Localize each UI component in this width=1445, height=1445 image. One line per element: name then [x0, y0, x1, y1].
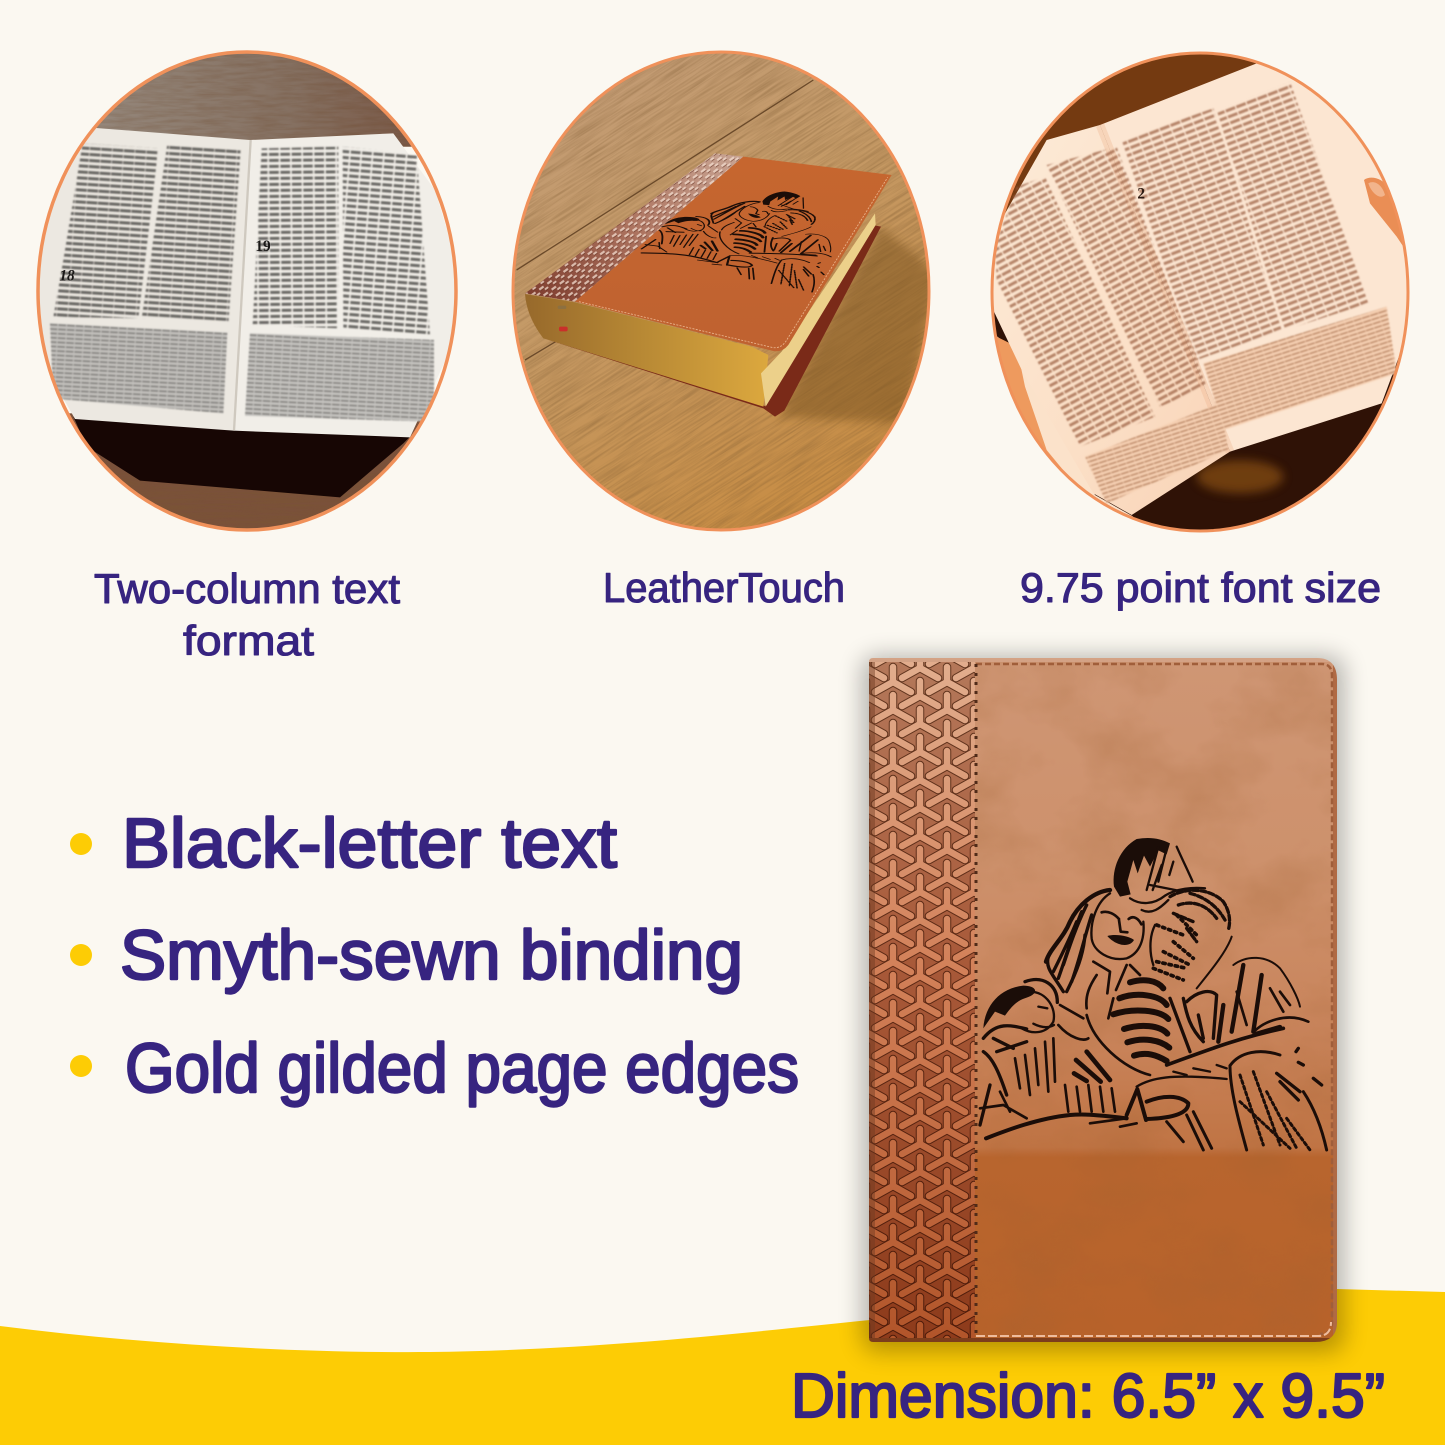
woven spine band: [869, 658, 975, 1342]
open bible pages: [990, 125, 1230, 515]
feature list: [70, 804, 799, 1107]
engraved family portrait: [980, 838, 1327, 1150]
spine band: [525, 153, 743, 302]
bullet: smyth-sewn: Smyth-sewn binding: [120, 916, 743, 994]
small engraving: [640, 192, 832, 292]
panel: font size photo: [980, 40, 1420, 540]
caption: two-column text: Two-column text: [94, 565, 400, 612]
page edges: [525, 294, 768, 407]
chapter number: 2: [1137, 185, 1145, 202]
lower table: [69, 413, 420, 528]
panel: leathertouch book photo: [512, 50, 930, 532]
front cover: [575, 157, 892, 351]
dimension label: Dimension: 6.5” x 9.5”: [791, 1362, 1385, 1431]
leather front: [975, 662, 1333, 1338]
panel: two-column text photo: [30, 40, 470, 540]
open bible pages: [30, 127, 250, 431]
left hand and page stack: [997, 336, 1133, 516]
left study notes: [1085, 403, 1228, 503]
right study notes: [1203, 307, 1397, 430]
right page text: [253, 147, 338, 328]
study notes right: [245, 333, 434, 422]
yellow wave band: [0, 1289, 1445, 1445]
red marker: [559, 327, 568, 331]
chapter numbers: 18: [59, 268, 75, 285]
left page text: [995, 177, 1155, 447]
stitching: [976, 664, 1332, 1334]
left page text: [53, 143, 158, 318]
caption: font size: 9.75 point font size: [1020, 564, 1381, 611]
caption: two-column text: format: [183, 617, 314, 664]
book shadow: [862, 656, 1344, 1352]
study notes left: [50, 323, 227, 413]
large book cover: [869, 658, 1337, 1342]
back cover: [543, 225, 881, 417]
caption: leathertouch: LeatherTouch: [603, 564, 845, 611]
table: [980, 40, 1420, 273]
right hand: [1364, 178, 1402, 246]
bullet: gold gilded: Gold gilded page edges: [125, 1029, 799, 1107]
wood table top: [96, 54, 412, 147]
panel: two-column text photo: 19: [255, 238, 271, 255]
bullet: black-letter: Black-letter text: [122, 804, 617, 882]
caption: two-column text: [94, 565, 400, 664]
wood floor: [514, 54, 928, 528]
right page text: [1122, 108, 1282, 360]
